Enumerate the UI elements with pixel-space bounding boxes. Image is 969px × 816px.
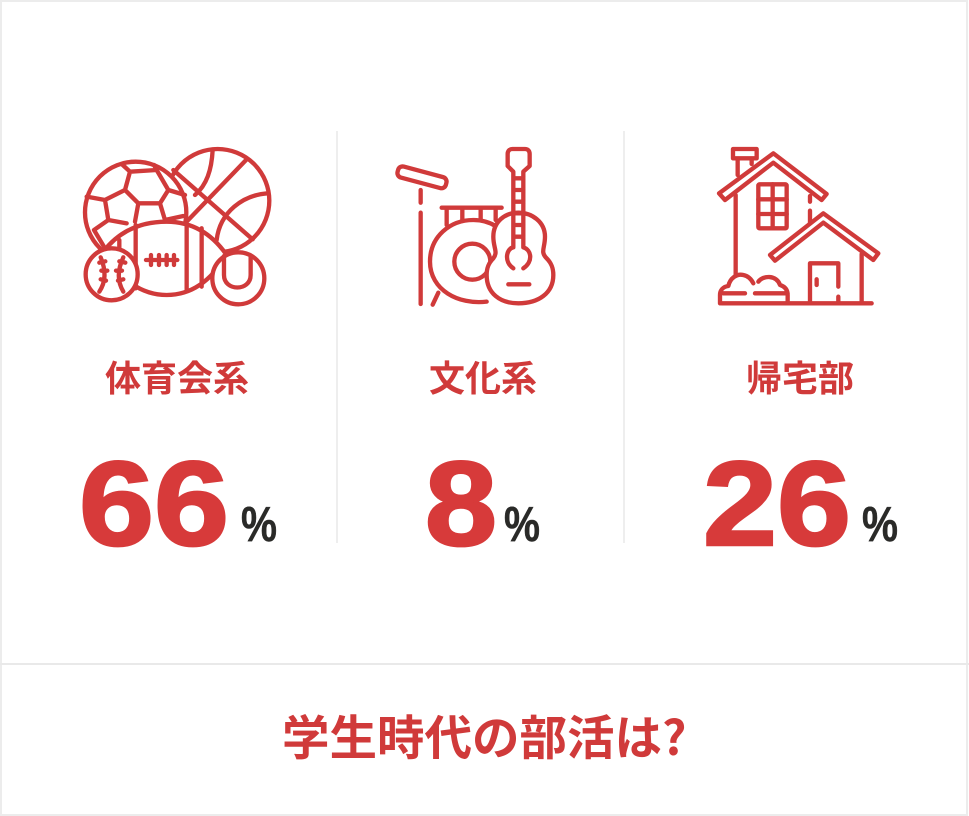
value: 8 percent: 8: [425, 437, 497, 571]
value: 66 percent: 66: [79, 437, 229, 571]
title: 学生時代の部活は?: [282, 700, 686, 769]
panel: go-home club: [703, 149, 898, 571]
label: culture: 文化系: [429, 358, 537, 399]
value: 66 percent: %: [241, 498, 277, 552]
value: 26 percent: %: [862, 498, 898, 552]
label: sports: 体育会系: [105, 358, 249, 399]
value: 26 percent: 26: [703, 437, 851, 571]
icon: drums and guitar: [396, 149, 553, 305]
value: 26 percent: [703, 437, 898, 571]
value: 8 percent: [425, 437, 540, 571]
label: go-home: 帰宅部: [746, 358, 854, 399]
panel: culture clubs: [396, 149, 553, 571]
panel: sports clubs: [79, 149, 277, 571]
value: 8 percent: %: [504, 498, 540, 552]
icon: sports balls: [85, 149, 269, 304]
icon: houses: [719, 149, 878, 303]
value: 66 percent: [79, 437, 277, 571]
